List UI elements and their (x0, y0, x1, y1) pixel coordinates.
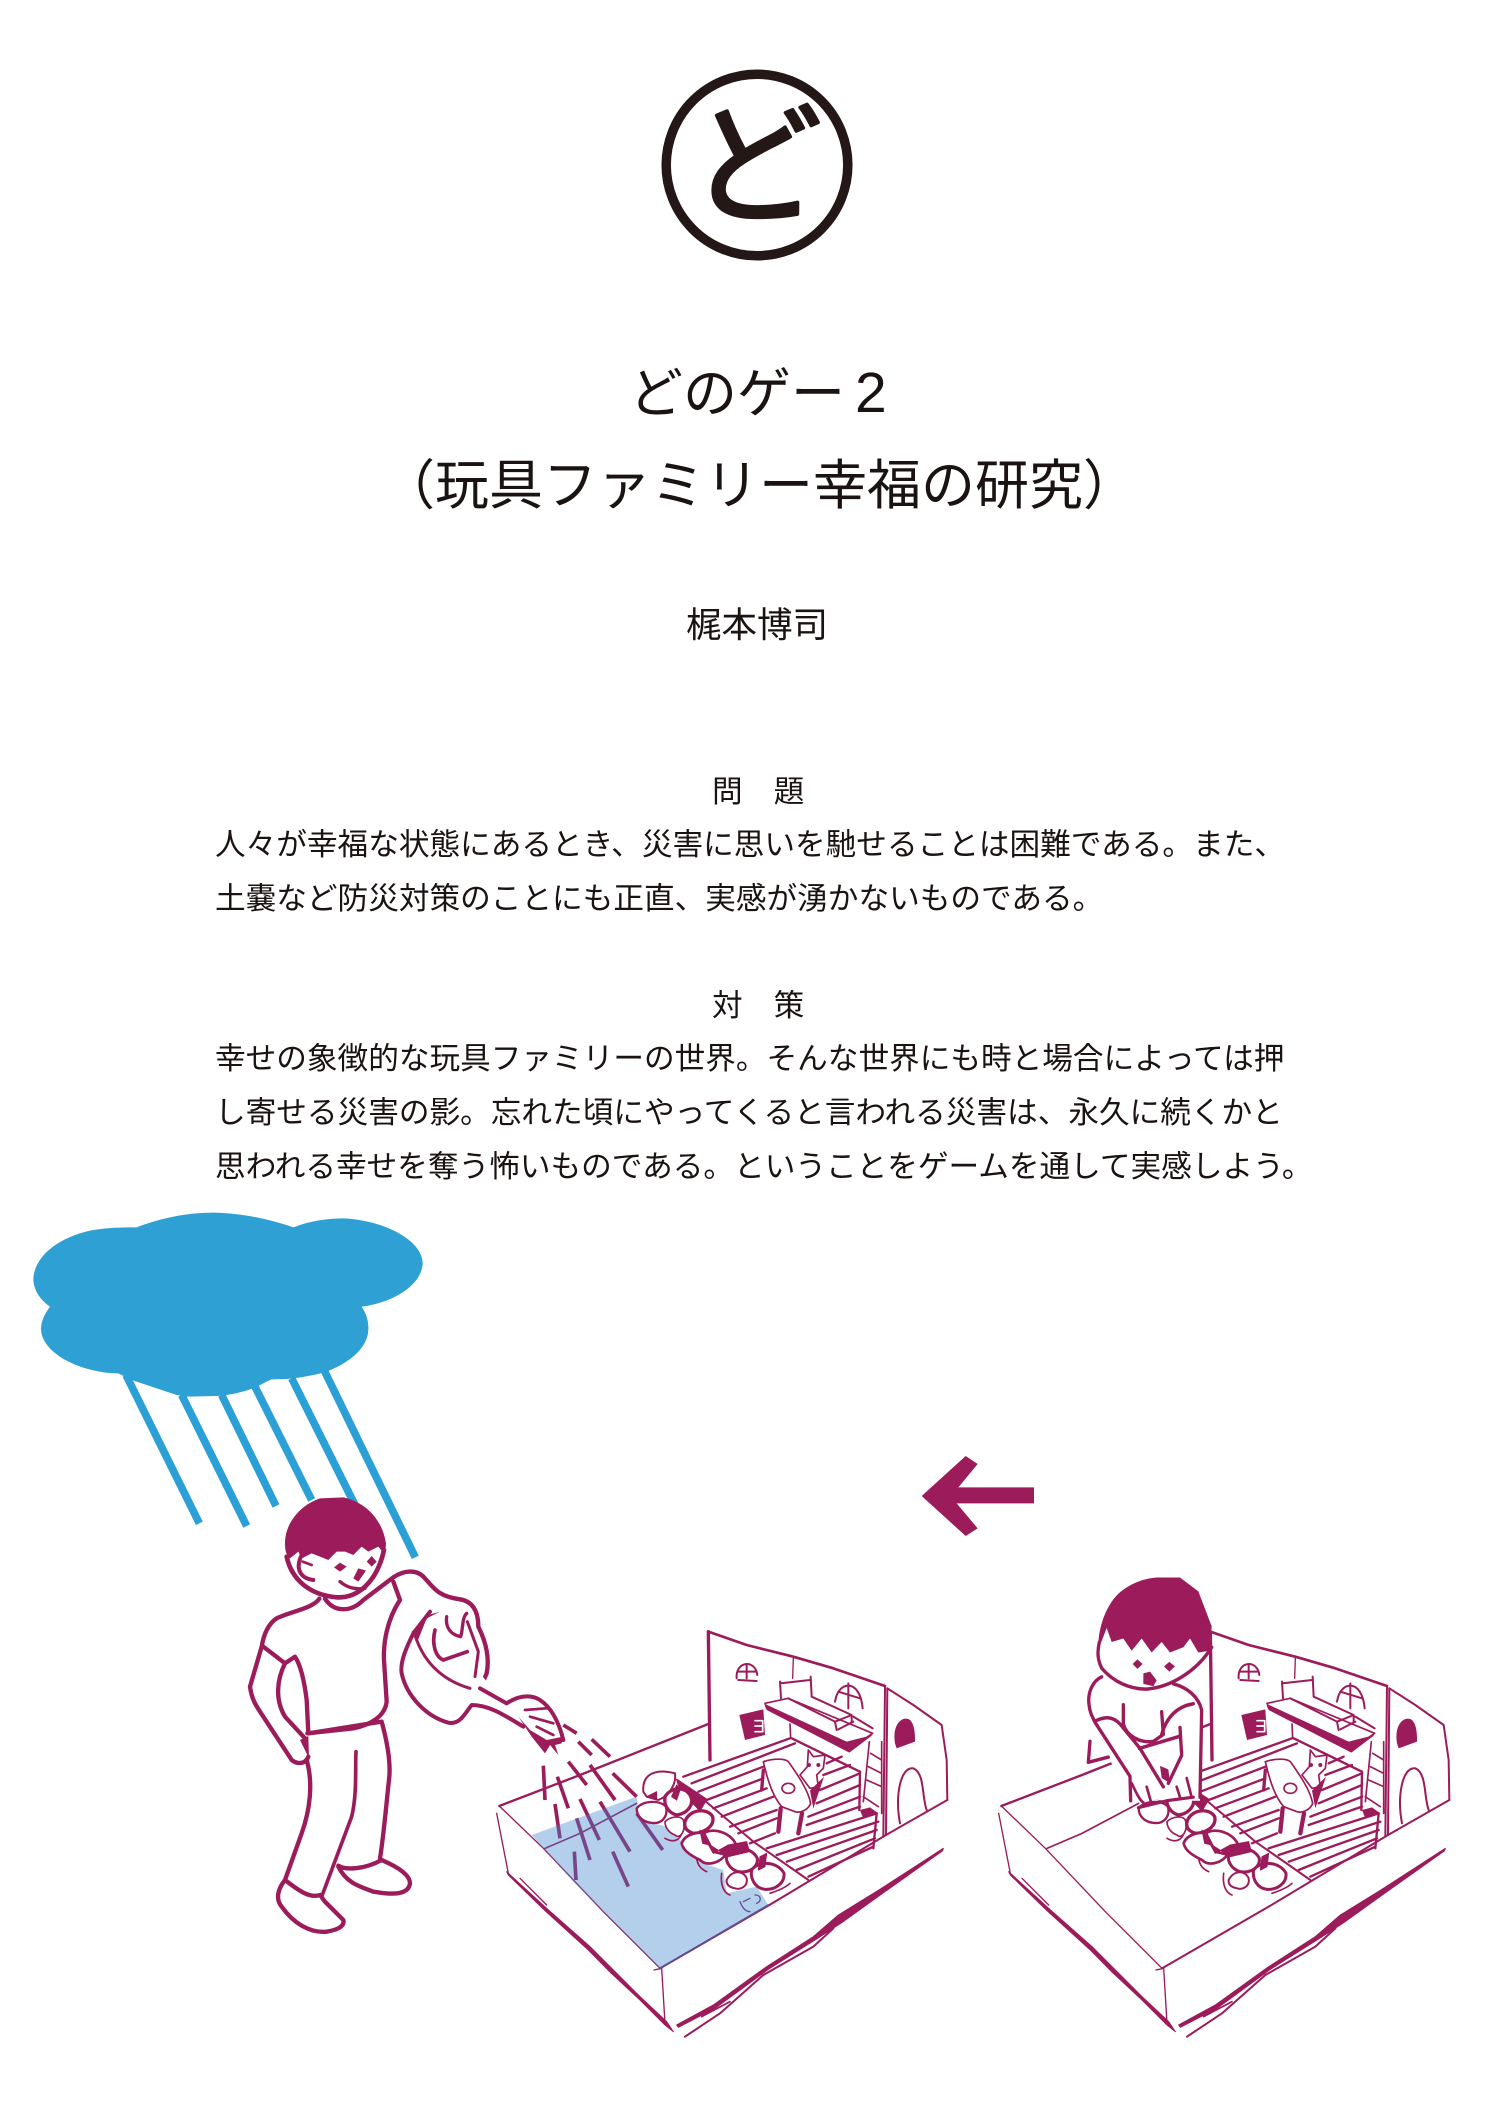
water drops (543, 1725, 663, 1887)
girl placing stones (1088, 1577, 1212, 1808)
problem text: 土嚢など防災対策のことにも正直、実感が湧かないものである。 (215, 882, 1103, 916)
head (287, 1550, 384, 1597)
title: どのゲー2 (629, 361, 887, 425)
subtitle: （玩具ファミリー幸福の研究） (381, 456, 1137, 516)
boy pouring watering can (250, 1497, 563, 1932)
rain (126, 1370, 415, 1557)
cloud (33, 1213, 423, 1397)
problem text: 人々が幸福な状態にあるとき、災害に思いを馳せることは困難である。また、 (215, 828, 1285, 862)
water (532, 1797, 768, 1968)
boy body (250, 1571, 488, 1932)
logo: ど in circle (666, 74, 848, 256)
countermeasure text (215, 1042, 1313, 1184)
countermeasure text: し寄せる災害の影。忘れた頃にやってくると言われる災害は、永久に続くかと (215, 1096, 1283, 1130)
logo: ど in circle: ど (690, 93, 822, 240)
right scene: dollhouse box (999, 1632, 1449, 2037)
countermeasure text: 幸せの象徴的な玩具ファミリーの世界。そんな世界にも時と場合によっては押 (215, 1042, 1284, 1076)
countermeasure text: 思われる幸せを奪う怖いものである。ということをゲームを通して実感しよう。 (215, 1150, 1313, 1184)
author: 梶本博司 (686, 605, 828, 645)
heading: countermeasure: 対 策 (712, 989, 804, 1023)
left scene: flooded dollhouse box (497, 1632, 947, 2037)
heading: problem: 問 題 (712, 775, 804, 809)
watering can (401, 1612, 563, 1740)
arrow (922, 1456, 1034, 1536)
problem text (215, 828, 1285, 916)
